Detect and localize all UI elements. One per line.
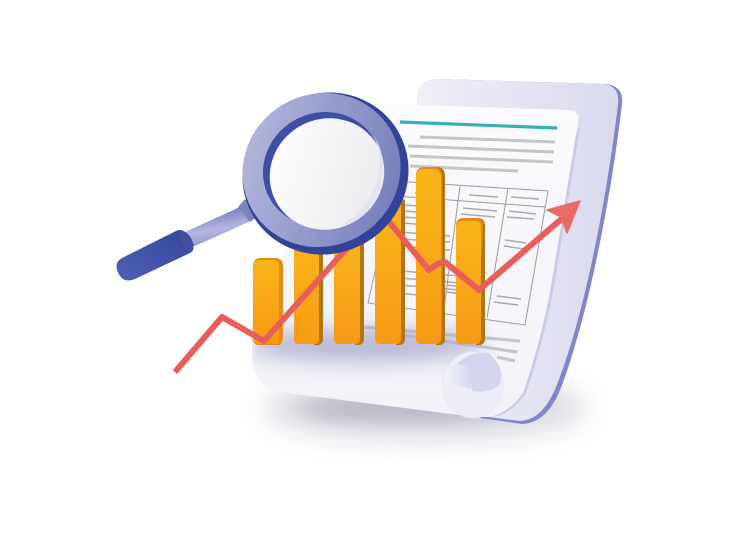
trend arrow: [175, 201, 580, 372]
front paper sheet: [252, 104, 581, 417]
lens rim: [213, 62, 438, 285]
bar 3: [334, 235, 364, 345]
back paper sheet: [417, 79, 622, 424]
illustration: report analysis: [116, 79, 622, 450]
handle stem: [178, 199, 258, 252]
bar 2: [294, 245, 323, 345]
heading line: teal: [400, 122, 557, 128]
lower text lines: [363, 327, 520, 361]
bar chart: [253, 167, 485, 345]
text lines: [408, 137, 555, 171]
lens glass: [249, 97, 405, 251]
data table: [368, 181, 548, 325]
bar 4: [375, 198, 405, 345]
paper roll: [443, 352, 503, 418]
ground shadow: [265, 378, 585, 438]
magnifying glass: [116, 62, 438, 285]
bar 5: [416, 167, 445, 345]
bar shadow on paper: [245, 328, 485, 362]
handle grip: [116, 230, 194, 280]
bar 1: [253, 258, 283, 345]
bar 6: [456, 218, 485, 345]
